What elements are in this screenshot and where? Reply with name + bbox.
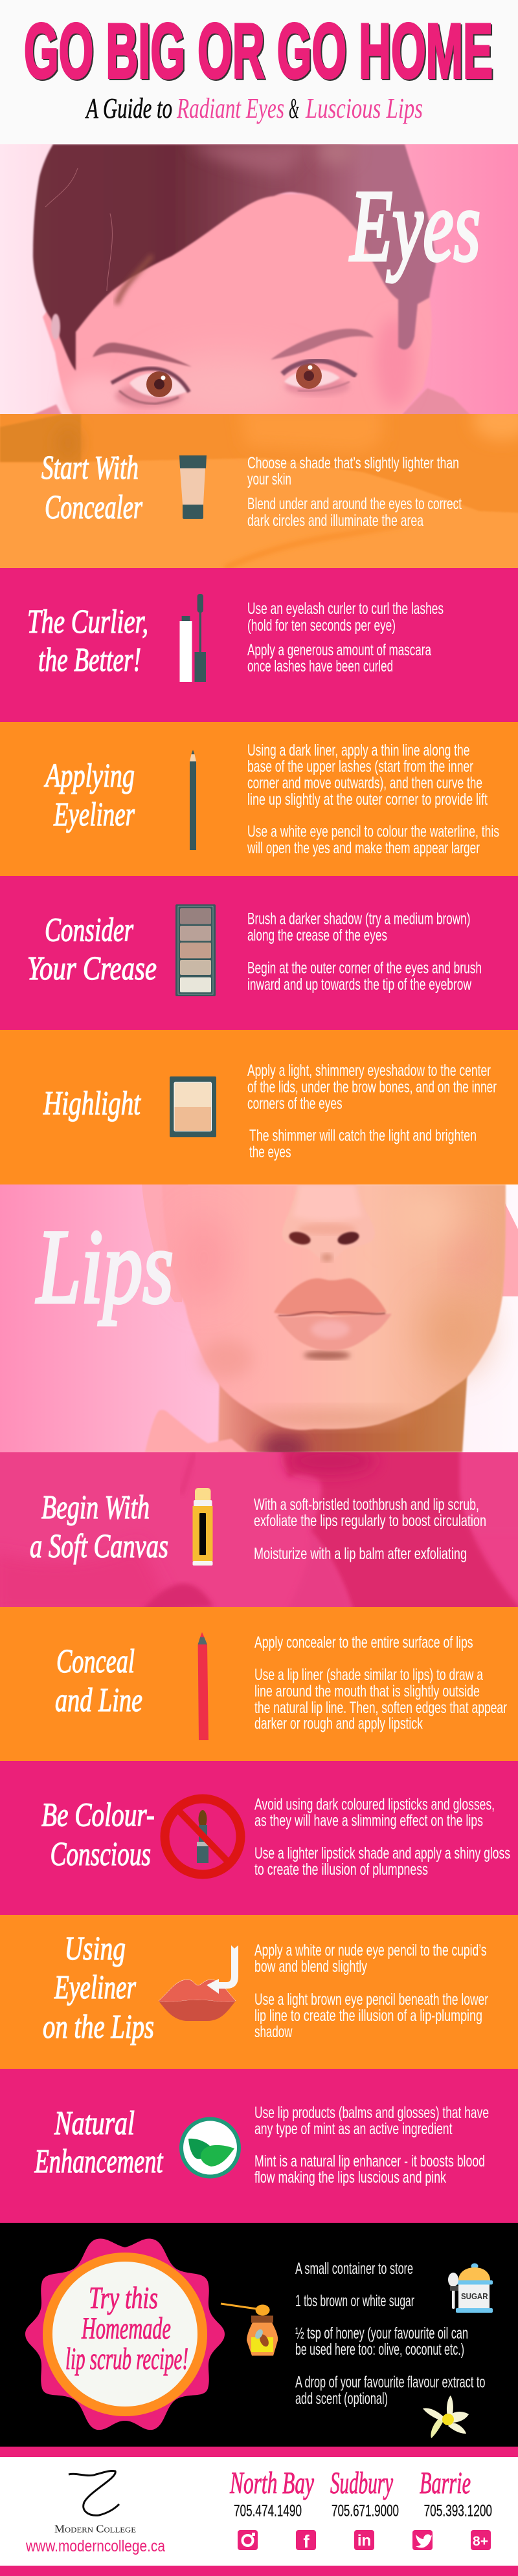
right eye [282, 361, 356, 396]
ears [142, 1184, 518, 1302]
header panel [0, 0, 518, 144]
text block [254, 1941, 488, 2041]
badge text: Homemade [81, 2311, 171, 2346]
heading: Using [65, 1930, 126, 1967]
hair [33, 144, 436, 371]
text block [254, 1496, 486, 1563]
icon: honey jar [221, 2304, 278, 2356]
face skin [43, 194, 432, 420]
text block [247, 910, 482, 994]
heading: Start With [41, 450, 139, 486]
left eye [111, 369, 189, 408]
social icons [238, 2530, 491, 2551]
heading: Conscious [51, 1836, 151, 1873]
heading: Enhancement [34, 2143, 164, 2180]
logo: Modern College [54, 2523, 136, 2535]
panel: natural enhancement [0, 2069, 518, 2223]
heading [43, 1930, 154, 2046]
heading: and Line [55, 1682, 142, 1719]
phone numbers: 705.671.9000 [332, 2502, 399, 2520]
icon: highlighter compact [170, 1076, 216, 1137]
shoulders [32, 388, 470, 414]
panel: eyes hero photo [0, 139, 518, 420]
text block [254, 2104, 489, 2187]
text block: to create the illusion of plumpness [254, 1861, 428, 1879]
campus names: Barrie [420, 2466, 471, 2500]
heading: Your Crease [27, 950, 157, 987]
text block: bow and blend slightly [254, 1958, 367, 1976]
heading: Eyeliner [54, 1969, 137, 2006]
text block: darker or rough and apply lipstick [254, 1715, 423, 1733]
heading: Begin With [41, 1489, 150, 1526]
heading: Conceal [56, 1643, 135, 1680]
icon: no dark lipstick [164, 1798, 241, 1875]
text block [247, 600, 444, 675]
panel: highlight [0, 1030, 518, 1184]
campus names: Sudbury [330, 2466, 393, 2500]
heading [55, 1643, 142, 1719]
logo [54, 2471, 136, 2535]
text block [247, 454, 462, 530]
text block: add scent (optional) [295, 2390, 388, 2408]
heading: Consider [45, 912, 134, 948]
icon: sugar jar [448, 2263, 493, 2313]
heading [41, 1797, 155, 1873]
campus names: North Bay [229, 2466, 314, 2500]
pink divider band [0, 2447, 518, 2457]
heading: the Better! [38, 642, 141, 679]
panel: applying eyeliner [0, 722, 518, 876]
heading [27, 912, 157, 987]
subtitle: Luscious Lips [305, 93, 423, 124]
text block [254, 1796, 510, 1879]
hair highlights [45, 139, 356, 340]
text block: shadow [254, 2023, 293, 2041]
icon: eyeshadow palette [175, 904, 216, 996]
arrow [207, 1945, 238, 1994]
panel: be colour-conscious [0, 1761, 518, 1915]
lips heading: Lips [36, 1208, 174, 1326]
subtitle: & [289, 93, 299, 124]
badge text [65, 2281, 188, 2376]
panel: lips hero photo [0, 1184, 518, 1462]
face [162, 1184, 506, 1430]
text block: 1 tbs brown or white sugar [295, 2292, 414, 2310]
left brow [93, 343, 192, 367]
panel: conceal and line [0, 1607, 518, 1761]
phone numbers [234, 2502, 492, 2520]
text block: once lashes have been curled [247, 657, 393, 675]
social icons: 8+ [473, 2534, 488, 2549]
icon: vanilla flower [423, 2396, 469, 2438]
phone numbers: 705.474.1490 [234, 2502, 302, 2520]
text block [247, 1062, 497, 1161]
subtitle: Radiant Eyes [176, 93, 284, 124]
subtitle [85, 93, 423, 124]
panel: begin with a soft canvas [0, 1446, 518, 1613]
heading [34, 2105, 164, 2180]
lips [274, 1278, 392, 1360]
text block: A small container to store [295, 2260, 413, 2278]
website: www.moderncollege.ca [25, 2537, 165, 2555]
heading [41, 450, 143, 526]
icon: mint leaf [181, 2119, 239, 2176]
text block: along the crease of the eyes [247, 926, 387, 944]
panel: using eyeliner on the lips [0, 1915, 518, 2069]
icon: eye pencil [190, 750, 196, 850]
icon: lip balm [193, 1488, 212, 1566]
heading: The Curlier, [27, 604, 148, 640]
hand [145, 1410, 248, 1452]
heading: Concealer [45, 489, 143, 526]
heading [30, 1489, 168, 1565]
panel: consider your crease [0, 876, 518, 1030]
pink bottom band [0, 2566, 518, 2576]
text block: flow making the lips luscious and pink [254, 2168, 446, 2187]
social icons: in [357, 2532, 371, 2549]
icon: concealer tube [179, 455, 207, 519]
panel: lip scrub recipe [0, 2223, 518, 2447]
heading [44, 758, 135, 833]
text block: (hold for ten seconds per eye) [247, 617, 396, 635]
text block: the eyes [249, 1143, 291, 1161]
social icons: f [303, 2531, 310, 2551]
icon: lips with arrow [159, 1945, 238, 2021]
badge [25, 2239, 225, 2430]
heading: Eyeliner [53, 796, 135, 833]
nose [282, 1184, 375, 1262]
text block [295, 2260, 486, 2408]
heading: Be Colour- [41, 1797, 155, 1834]
text block [254, 1633, 507, 1733]
icon: mascara [180, 594, 206, 682]
text block: corners of the eyes [247, 1095, 343, 1113]
subtitle: A Guide to [85, 93, 172, 124]
heading: Natural [54, 2105, 135, 2142]
icon: sugar jar: SUGAR [461, 2291, 488, 2301]
badge text: lip scrub recipe! [65, 2342, 188, 2376]
heading: Applying [44, 758, 135, 794]
neck [218, 1371, 467, 1452]
text block: Apply a generous amount of mascara [247, 641, 431, 659]
panel: the curlier the better [0, 568, 518, 722]
panel: start with concealer [0, 401, 518, 568]
text block [247, 741, 499, 857]
heading: Highlight [43, 1086, 141, 1122]
icon: lip liner [198, 1632, 208, 1740]
campus names [229, 2466, 471, 2500]
right brow [271, 329, 374, 360]
panel: footer [0, 2457, 518, 2566]
heading [27, 604, 148, 679]
heading: a Soft Canvas [30, 1528, 168, 1565]
text block: your skin [247, 470, 291, 488]
text block: dark circles and illuminate the area [247, 512, 423, 530]
heading: on the Lips [43, 2009, 154, 2046]
badge text: Try this [89, 2281, 158, 2315]
